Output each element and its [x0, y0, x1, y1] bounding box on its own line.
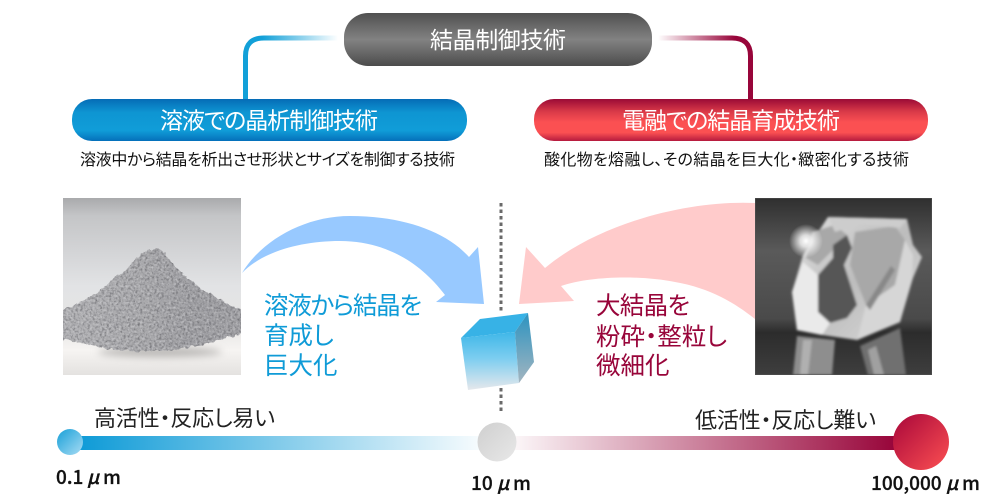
right description: 酸化物を熔融し、その結晶を巨大化・緻密化する技術	[544, 146, 909, 170]
scale point: 10 um	[478, 422, 516, 462]
text: solution growth: 巨大化	[264, 347, 338, 382]
crystal reflection	[793, 328, 906, 375]
text: crush and size: 粉砕・整粒し	[596, 318, 727, 353]
title pill: 結晶制御技術	[430, 21, 566, 55]
title pill	[344, 13, 652, 66]
label: 0.1 um: μ	[87, 463, 100, 490]
left heading pill	[72, 99, 467, 141]
label: low activity: 低活性・反応し難い	[695, 403, 876, 435]
photo: crystal	[755, 198, 932, 375]
divider: dotted line	[500, 203, 502, 413]
label: 100,000 um: m	[962, 469, 980, 496]
scale point: 0.1 um	[57, 429, 83, 455]
label: 100,000 um: 100,000	[871, 469, 942, 496]
crystal glare	[790, 224, 822, 256]
right heading pill: 電融での結晶育成技術	[622, 102, 840, 136]
label: 10 um: m	[513, 469, 531, 496]
connector: blue line from title to left pill	[246, 38, 338, 100]
text: solution growth: 溶液から結晶を	[264, 287, 422, 322]
text: crush and size	[596, 287, 727, 382]
text: solution growth	[264, 287, 422, 382]
scale point: 100,000 um	[893, 414, 949, 470]
icon: cube	[461, 313, 534, 390]
arrow: pink, crystal to cube	[519, 203, 755, 319]
label: high activity: 高活性・反応し易い	[94, 401, 275, 433]
arrow: blue, powder to cube	[242, 216, 484, 304]
right heading pill	[534, 99, 928, 141]
connector: red line from title to right pill	[658, 38, 750, 100]
label: 100,000 um: μ	[946, 469, 959, 496]
scale bar	[57, 414, 949, 470]
text: crush and size: 大結晶を	[596, 287, 690, 322]
label: 10 um: 10	[471, 469, 493, 496]
photo: powder pile	[58, 198, 245, 375]
label: 10 um: μ	[497, 469, 510, 496]
crystal body	[792, 217, 922, 340]
text: solution growth: 育成し	[264, 317, 334, 352]
text: crush and size: 微細化	[596, 347, 670, 382]
label: 0.1 um: m	[103, 463, 121, 490]
left heading pill: 溶液での晶析制御技術	[160, 102, 378, 136]
label: 0.1 um: 0.1	[56, 463, 83, 490]
left description: 溶液中から結晶を析出させ形状とサイズを制御する技術	[80, 146, 455, 170]
